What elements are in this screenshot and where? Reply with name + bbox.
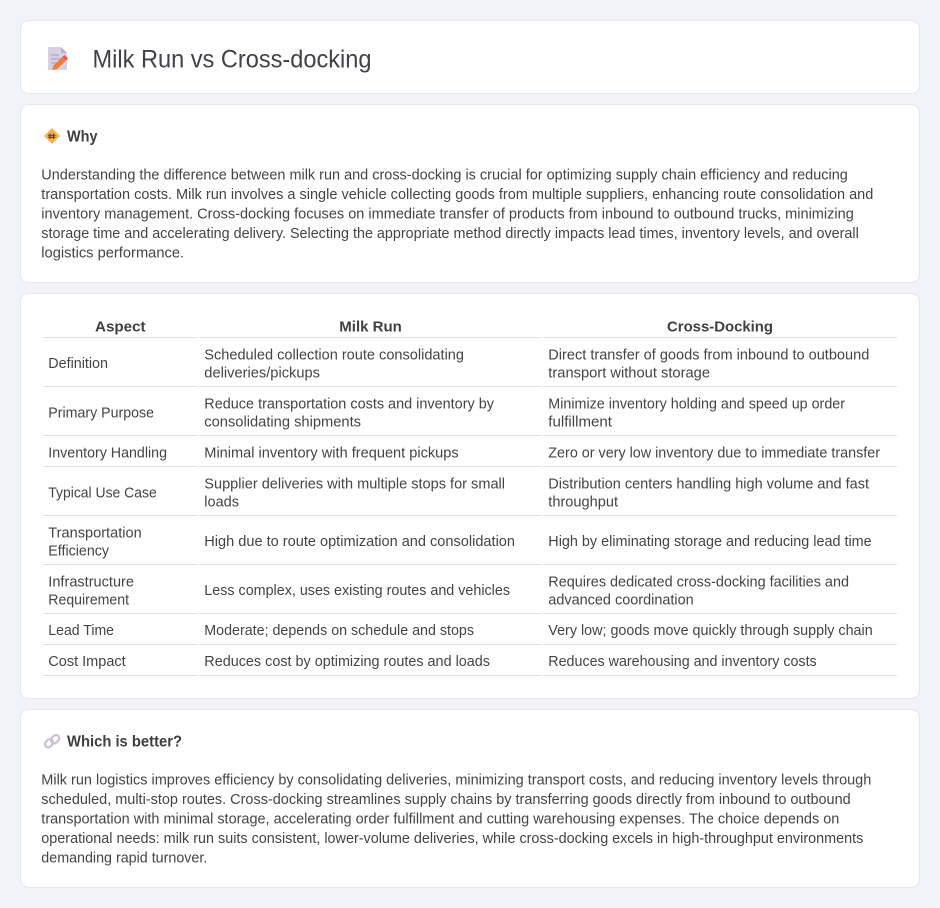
text block: why paragraph: storage time and accelerating delivery. Selecting the appropriate method directly impacts lead times, inventory levels, and overall <box>41 225 859 242</box>
row: primary purpose: Minimize inventory holding and speed up order <box>548 395 845 412</box>
row: inventory handling: Inventory Handling <box>48 444 167 461</box>
icon: memo with pencil <box>48 47 68 70</box>
row: lead time: Moderate; depends on schedule and stops <box>204 622 474 639</box>
panel: comparison table <box>20 294 920 698</box>
row: typical use case: throughput <box>548 493 619 510</box>
text block: which is better paragraph <box>41 771 871 866</box>
row: typical use case: Supplier deliveries with multiple stops for small <box>204 475 505 492</box>
text block: why paragraph: inventory management. Cross-docking focuses on immediate transfer of products from inbound to outbound trucks, minimizing <box>41 205 854 222</box>
row: cost impact <box>48 653 817 670</box>
row: definition: Scheduled collection route consolidating <box>204 346 464 363</box>
row: definition: transport without storage <box>548 364 710 381</box>
text block: which is better paragraph: scheduled, multi-stop routes. Cross-docking streamlines supply chains by transferring goods directly from inbound to outbound <box>41 791 851 808</box>
row: cost impact: Cost Impact <box>48 653 126 670</box>
row: typical use case: loads <box>204 493 239 510</box>
row: inventory handling: Zero or very low inventory due to immediate transfer <box>548 444 880 461</box>
row: inventory handling <box>48 444 880 461</box>
title: Milk Run vs Cross-docking <box>92 46 372 74</box>
row: definition <box>48 346 869 381</box>
text block: why paragraph: logistics performance. <box>41 244 184 261</box>
text block: why paragraph: Understanding the difference between milk run and cross-docking is crucial for optimizing supply chain efficiency and reducing <box>41 166 848 183</box>
panel: why <box>20 104 920 282</box>
row: infrastructure requirement: Requirement <box>48 591 130 608</box>
row: infrastructure requirement: Infrastructure <box>48 573 134 590</box>
row: definition: Definition <box>48 355 108 372</box>
text block: which is better paragraph: operational needs: milk run suits consistent, lower-volume deliveries, while cross-docking excels in high-throughput environments <box>41 830 863 847</box>
icon: orange diamond sign <box>44 128 60 144</box>
table header row <box>95 319 773 336</box>
row: primary purpose: Primary Purpose <box>48 404 154 421</box>
icon: chain link <box>44 734 61 749</box>
heading: which is better: Which is better? <box>67 734 182 751</box>
row: transportation efficiency: High due to route optimization and consolidation <box>204 533 515 550</box>
row: infrastructure requirement: Less complex, uses existing routes and vehicles <box>204 582 510 599</box>
table header row: Milk Run <box>339 319 402 336</box>
row: infrastructure requirement: advanced coordination <box>548 591 694 608</box>
row: transportation efficiency: High by eliminating storage and reducing lead time <box>548 533 872 550</box>
text block: which is better paragraph: Milk run logistics improves efficiency by consolidating deliveries, minimizing transport costs, and reducing inventory levels through <box>41 771 871 788</box>
row: lead time: Very low; goods move quickly through supply chain <box>548 622 873 639</box>
row: infrastructure requirement: Requires dedicated cross-docking facilities and <box>548 573 849 590</box>
row: lead time <box>48 622 873 639</box>
row: typical use case: Typical Use Case <box>48 484 157 502</box>
row: transportation efficiency: Transportation <box>48 524 142 541</box>
row: lead time: Lead Time <box>48 622 114 639</box>
row: typical use case <box>48 475 870 510</box>
text block: why paragraph <box>41 166 873 261</box>
text block: which is better paragraph: transportation with minimal storage, accelerating order fulfillment and cutting warehousing expenses. The choice depends on <box>41 810 839 827</box>
panel: which is better <box>20 710 920 888</box>
row: transportation efficiency <box>48 524 872 559</box>
row: infrastructure requirement <box>48 573 849 608</box>
row: definition: Direct transfer of goods from inbound to outbound <box>548 346 869 363</box>
row: transportation efficiency: Efficiency <box>48 542 109 559</box>
row: typical use case: Distribution centers handling high volume and fast <box>548 475 870 492</box>
row: primary purpose: fulfillment <box>548 413 613 430</box>
text block: why paragraph: transportation costs. Milk run involves a single vehicle collecting goods from multiple suppliers, enhancing route consolidation and <box>41 186 873 203</box>
table header row: Aspect <box>95 319 146 336</box>
row: cost impact: Reduces cost by optimizing routes and loads <box>204 653 490 670</box>
row: primary purpose: consolidating shipments <box>204 413 361 430</box>
row: definition: deliveries/pickups <box>204 364 320 381</box>
row: inventory handling: Minimal inventory with frequent pickups <box>204 444 459 461</box>
row: cost impact: Reduces warehousing and inventory costs <box>548 653 817 670</box>
row: primary purpose <box>48 395 845 430</box>
text block: which is better paragraph: demanding rapid turnover. <box>41 849 207 866</box>
heading: why: Why <box>67 128 98 146</box>
table header row: Cross-Docking <box>667 319 773 336</box>
row: primary purpose: Reduce transportation costs and inventory by <box>204 395 494 412</box>
panel: title header <box>20 20 920 94</box>
